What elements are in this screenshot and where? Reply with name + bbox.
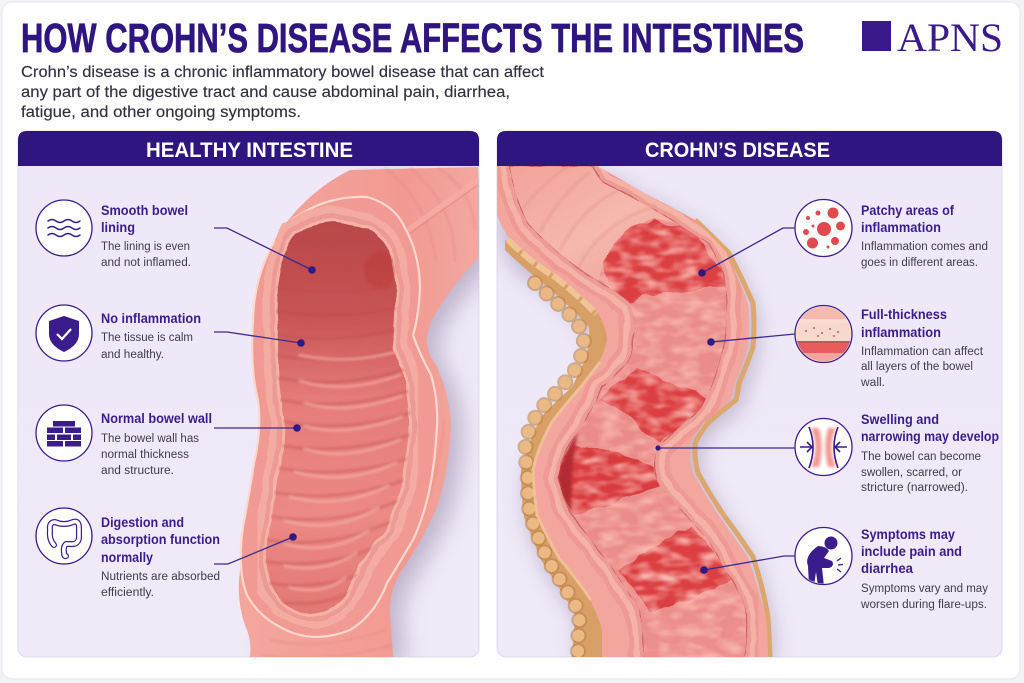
label: inflammation xyxy=(861,220,941,235)
label: and healthy. xyxy=(101,349,164,361)
label: lining xyxy=(101,220,135,235)
intro text: fatigue, and other ongoing symptoms. xyxy=(21,104,301,121)
label: Symptoms vary and may xyxy=(861,583,988,595)
label xyxy=(101,311,201,361)
label: normally xyxy=(101,550,153,565)
label: Patchy areas of xyxy=(861,203,954,218)
leader line xyxy=(698,228,795,277)
inflamed patch 4 xyxy=(618,525,735,610)
label xyxy=(101,411,212,477)
label: Nutrients are absorbed xyxy=(101,571,220,583)
leader line xyxy=(707,334,795,346)
label: include pain and xyxy=(861,544,962,559)
label: Symptoms may xyxy=(861,527,955,542)
label: The bowel can become xyxy=(861,451,981,463)
callout: normal bowel wall xyxy=(36,405,301,477)
callout: digestion and absorption xyxy=(36,508,297,599)
callout: swelling and narrowing xyxy=(655,412,999,494)
label: diarrhea xyxy=(861,561,913,576)
label: Inflammation can affect xyxy=(861,346,984,358)
label: The lining is even xyxy=(101,241,190,253)
label: The tissue is calm xyxy=(101,332,193,344)
icon: wall cross-section xyxy=(795,305,853,363)
label: No inflammation xyxy=(101,311,201,326)
illustration: healthy intestine xyxy=(239,167,490,665)
label xyxy=(101,203,191,269)
icon: shield xyxy=(36,305,92,361)
intro text xyxy=(21,64,545,121)
label: and not inflamed. xyxy=(101,257,191,269)
label: all layers of the bowel xyxy=(861,361,973,373)
label: The bowel wall has xyxy=(101,433,199,445)
label: normal thickness xyxy=(101,449,189,461)
leader line xyxy=(214,228,316,274)
label: stricture (narrowed). xyxy=(861,482,968,494)
label: efficiently. xyxy=(101,587,154,599)
callout: patchy areas of inflammation xyxy=(698,200,988,277)
label xyxy=(860,307,984,389)
label: Swelling and xyxy=(861,412,939,427)
leader line xyxy=(700,556,795,574)
inflamed patch 2 xyxy=(600,370,710,443)
inflamed patch 1 xyxy=(603,220,728,303)
label xyxy=(101,515,220,599)
label: wall. xyxy=(860,377,885,389)
icon: red patches xyxy=(795,200,852,256)
header: crohn's disease: CROHN’S DISEASE xyxy=(645,139,830,162)
panel: healthy intestine xyxy=(18,131,490,665)
callout: symptoms xyxy=(700,527,988,611)
callout: no inflammation xyxy=(36,305,305,361)
icon: bricks xyxy=(36,405,92,461)
label: narrowing may develop xyxy=(861,429,999,444)
label: Inflammation comes and xyxy=(861,241,988,253)
leader line xyxy=(214,332,305,347)
label: absorption function xyxy=(101,532,220,547)
callout: full-thickness inflammation xyxy=(707,305,984,389)
label: Normal bowel wall xyxy=(101,411,212,426)
label xyxy=(861,203,988,269)
logo: APNS: APNS xyxy=(897,15,1003,60)
icon: narrowing arrows xyxy=(795,418,852,476)
label: swollen, scarred, or xyxy=(861,467,962,479)
label: Smooth bowel xyxy=(101,203,188,218)
label xyxy=(861,412,999,494)
label: Full-thickness xyxy=(861,307,947,322)
icon: person in pain xyxy=(795,528,852,586)
icon: waves xyxy=(36,200,92,256)
leader line xyxy=(655,445,795,451)
label xyxy=(860,527,988,611)
label: Digestion and xyxy=(101,515,184,530)
illustration: inflamed intestine xyxy=(497,160,774,665)
label: and structure. xyxy=(101,465,174,477)
leader line xyxy=(214,424,301,432)
inflamed patch 3 xyxy=(552,445,660,516)
leader line xyxy=(214,533,297,564)
header: healthy intestine xyxy=(18,131,479,166)
label: goes in different areas. xyxy=(861,257,978,269)
panel: crohn's disease xyxy=(497,131,1002,665)
intro text: any part of the digestive tract and cause abdominal pain, diarrhea, xyxy=(21,84,510,101)
label: worsen during flare-ups. xyxy=(860,599,987,611)
icon: colon xyxy=(36,508,92,564)
callout: smooth bowel lining xyxy=(36,200,316,274)
header: crohn's disease xyxy=(497,131,1002,166)
header: healthy intestine: HEALTHY INTESTINE xyxy=(146,139,353,162)
label: inflammation xyxy=(861,325,941,340)
intro text: Crohn’s disease is a chronic inflammatory bowel disease that can affect xyxy=(21,64,545,81)
